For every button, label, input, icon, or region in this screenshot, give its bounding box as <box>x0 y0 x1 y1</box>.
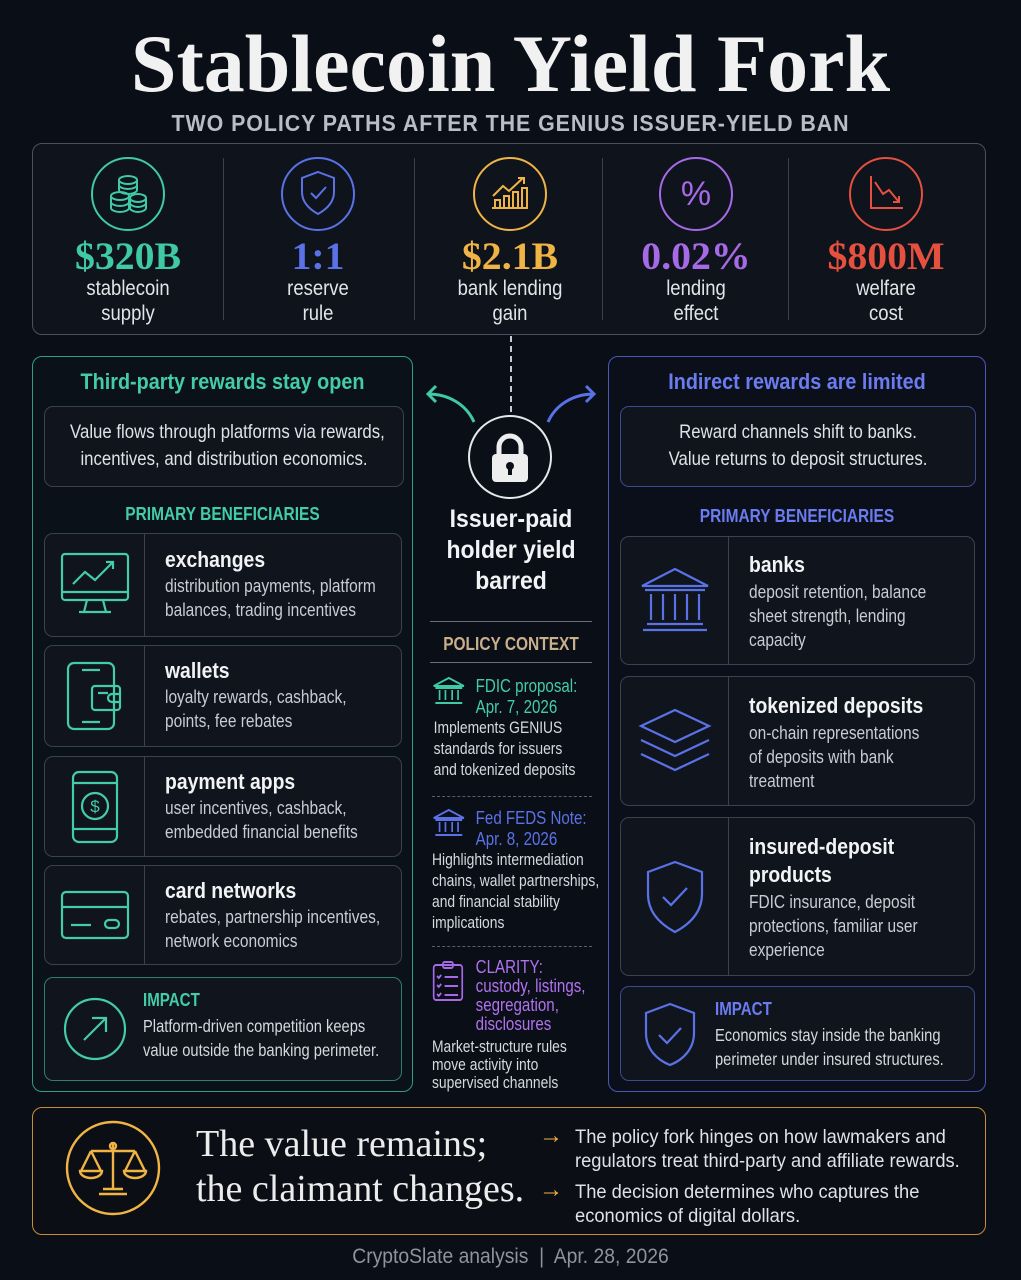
bullet 2: → <box>539 1176 563 1203</box>
card: banks: capacity <box>749 630 806 650</box>
card: tokenized deposits: of deposits with bank <box>749 747 894 767</box>
context: Fed: implications <box>432 914 504 932</box>
card: exchanges: distribution payments, platform <box>165 576 376 596</box>
center heading: holder yield <box>446 536 576 564</box>
panel: stats: $2.1B <box>462 235 558 278</box>
card: tokenized deposits <box>620 676 975 806</box>
panel: right path <box>608 356 986 1092</box>
panel: stats: rule <box>303 302 333 325</box>
card: exchanges <box>44 533 402 637</box>
conclusion headline: The value remains; <box>196 1123 487 1165</box>
card: tokenized deposits: tokenized deposits <box>749 693 923 718</box>
stat: lending effect <box>641 157 751 325</box>
card: banks <box>620 536 975 665</box>
panel: stats: reserve <box>287 277 349 300</box>
panel: left path <box>32 356 413 1092</box>
stat: supply <box>75 157 181 325</box>
card: exchanges: exchanges <box>165 547 265 572</box>
panel: stats: 1:1 <box>291 235 345 278</box>
context: Fed: chains, wallet partnerships, <box>432 872 599 890</box>
context: CLARITY: Market-structure rules <box>432 1038 567 1056</box>
context: CLARITY: disclosures <box>476 1014 551 1034</box>
label: PRIMARY BENEFICIARIES <box>125 504 320 524</box>
panel: conclusion: The decision determines who captures the <box>575 1181 919 1203</box>
card: payment apps: payment apps <box>165 769 295 794</box>
label: policy context: POLICY CONTEXT <box>443 634 579 654</box>
card: insured-deposit products <box>620 817 975 976</box>
context: FDIC: Apr. 7, 2026 <box>476 697 557 717</box>
impact: IMPACT <box>143 990 200 1010</box>
stat: lending gain <box>458 157 562 325</box>
card: card networks: card networks <box>165 878 296 903</box>
card: payment apps: embedded financial benefits <box>165 822 358 842</box>
context: FDIC: Implements GENIUS <box>434 719 562 737</box>
card: banks: deposit retention, balance <box>749 582 926 602</box>
context: FDIC: and tokenized deposits <box>434 761 575 779</box>
panel: stats: welfare <box>856 277 916 300</box>
label: PRIMARY BENEFICIARIES <box>700 506 894 526</box>
conclusion headline <box>196 1123 524 1210</box>
panel: stats: lending <box>666 277 726 300</box>
panel: stats <box>32 143 986 335</box>
card: payment apps: user incentives, cashback, <box>165 798 347 818</box>
panel: stats: $320B <box>75 235 181 278</box>
icon: scales <box>66 1120 160 1216</box>
card: wallets: wallets <box>165 658 230 683</box>
panel: stats: cost <box>869 302 903 325</box>
panel: stats: stablecoin <box>86 277 170 300</box>
card: card networks <box>44 865 402 965</box>
summary box: Value flows through platforms via rewards, <box>70 421 385 443</box>
card: insured-deposit products: products <box>749 862 832 887</box>
context: CLARITY <box>432 957 585 1092</box>
context: CLARITY: supervised channels <box>432 1074 558 1092</box>
summary box <box>620 406 976 487</box>
context: CLARITY: segregation, <box>476 995 559 1015</box>
panel: stats: bank lending <box>458 277 562 300</box>
center heading: barred <box>475 567 547 595</box>
panel: conclusion: The policy fork hinges on how lawmakers and <box>575 1126 946 1148</box>
stat: welfare cost <box>827 157 945 325</box>
panel: conclusion: economics of digital dollars. <box>575 1205 800 1227</box>
summary box: Reward channels shift to banks. <box>679 421 917 443</box>
footer: CryptoSlate analysis | Apr. 28, 2026 <box>352 1245 669 1268</box>
context: CLARITY: move activity into <box>432 1056 538 1074</box>
panel: stats: effect <box>674 302 718 325</box>
card: banks: sheet strength, lending <box>749 606 906 626</box>
title: Stablecoin Yield Fork <box>131 18 890 109</box>
panel: conclusion: regulators treat third-party and affiliate rewards. <box>575 1150 960 1172</box>
card: insured-deposit products: experience <box>749 940 825 960</box>
summary box: incentives, and distribution economics. <box>80 448 368 470</box>
impact: IMPACT <box>715 999 772 1019</box>
context: Fed <box>432 808 599 932</box>
panel: conclusion <box>32 1107 986 1235</box>
context: FDIC: standards for issuers <box>434 740 562 758</box>
panel: stats: $800M <box>827 235 945 278</box>
card: tokenized deposits: on-chain representations <box>749 723 919 743</box>
summary box <box>44 406 404 487</box>
context: Fed: Highlights intermediation <box>432 851 584 869</box>
context: FDIC: FDIC proposal: <box>476 676 577 696</box>
panel: stats: 0.02% <box>641 235 751 278</box>
heading: Third-party rewards stay open <box>81 369 364 394</box>
summary box: Value returns to deposit structures. <box>669 448 927 470</box>
context: Fed: Apr. 8, 2026 <box>476 829 557 849</box>
impact: perimeter under insured structures. <box>715 1049 944 1069</box>
card: card networks: rebates, partnership incentives, <box>165 907 380 927</box>
card: insured-deposit products: FDIC insurance, deposit <box>749 892 915 912</box>
card: tokenized deposits: treatment <box>749 771 814 791</box>
card: payment apps: $ <box>90 796 100 816</box>
heading: Indirect rewards are limited <box>668 369 926 394</box>
subtitle: TWO POLICY PATHS AFTER THE GENIUS ISSUER-YIELD BAN <box>172 110 849 136</box>
card: insured-deposit products: protections, familiar user <box>749 916 918 936</box>
impact: value outside the banking perimeter. <box>143 1040 379 1060</box>
center heading <box>446 505 576 595</box>
center column <box>426 385 596 663</box>
card: banks: banks <box>749 552 805 577</box>
context: Fed: Fed FEDS Note: <box>476 808 587 828</box>
card: insured-deposit products: insured-deposit <box>749 834 894 859</box>
context: CLARITY: CLARITY: <box>476 957 543 977</box>
arrows <box>426 385 596 423</box>
impact: Platform-driven competition keeps <box>143 1016 365 1036</box>
context: FDIC <box>433 676 577 779</box>
context: Fed: and financial stability <box>432 893 560 911</box>
impact: Economics stay inside the banking <box>715 1025 941 1045</box>
card: card networks: network economics <box>165 931 298 951</box>
card: payment apps <box>44 756 402 857</box>
panel: stats: gain <box>493 302 527 325</box>
panel: stats: supply <box>101 302 155 325</box>
context: CLARITY: custody, listings, <box>476 976 585 996</box>
card: wallets: loyalty rewards, cashback, <box>165 687 347 707</box>
card: wallets <box>44 645 402 747</box>
card: wallets: points, fee rebates <box>165 711 292 731</box>
bullet 1: → <box>539 1122 563 1149</box>
card: exchanges: balances, trading incentives <box>165 600 356 620</box>
panel: stats: % <box>681 175 711 213</box>
impact <box>44 977 402 1081</box>
center heading: Issuer-paid <box>450 505 572 533</box>
stat: reserve <box>281 157 355 325</box>
icon: lock <box>468 415 552 499</box>
conclusion headline: the claimant changes. <box>196 1168 524 1210</box>
impact <box>620 986 975 1081</box>
